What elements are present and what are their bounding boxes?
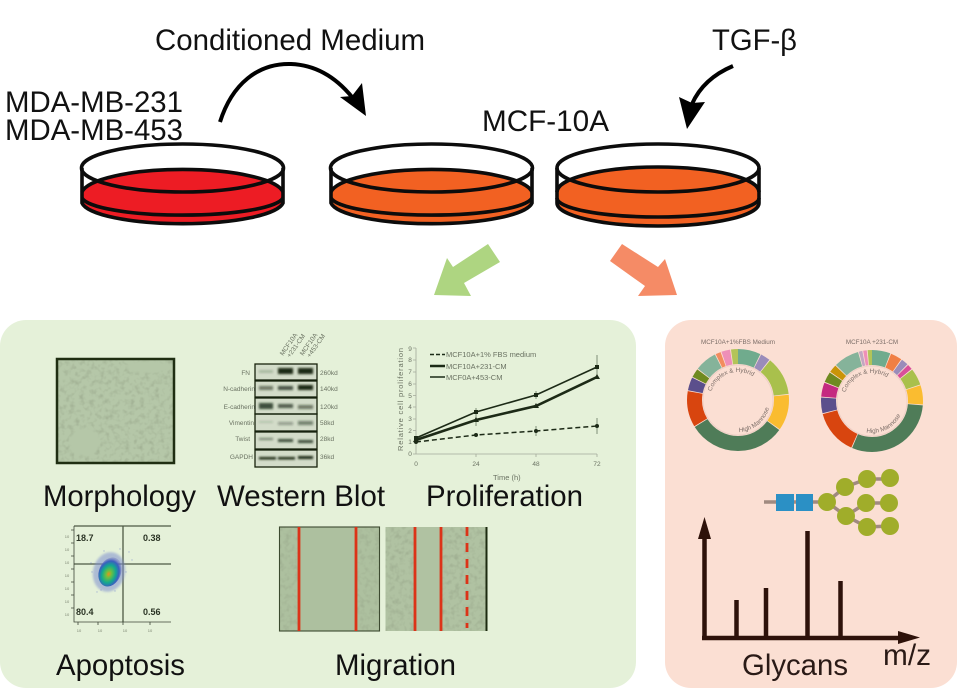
- donut chart: MCF10A +231-CM: High Mannose: [866, 414, 900, 434]
- arrow: to phenotype panel: [434, 244, 500, 296]
- scatter population: [89, 548, 133, 595]
- axis tick labels: [65, 534, 153, 633]
- heading: morphology: Morphology: [43, 480, 196, 513]
- series markers: [413, 365, 600, 444]
- y tick labels: 4: [408, 404, 412, 411]
- y tick labels: 0: [408, 451, 412, 458]
- quadrant values: 80.4: [76, 607, 94, 617]
- blot protein labels: Twist: [235, 436, 250, 443]
- dish: MCF-10A with TGF-beta: [557, 144, 759, 226]
- blot sizes: 28kd: [320, 436, 334, 443]
- blot protein labels: Vimentin: [229, 420, 254, 427]
- heading: migration: Migration: [335, 649, 456, 682]
- blot protein labels: FN: [241, 370, 250, 377]
- heading: western blot: Western Blot: [217, 480, 386, 513]
- label: TGF-beta: TGF-β: [712, 24, 797, 57]
- mass spectrum: [698, 517, 920, 644]
- chart legend: [430, 350, 536, 382]
- series lines: [416, 355, 597, 442]
- heading: glycans: Glycans: [742, 649, 848, 682]
- chart legend: MCF10A+231-CM: [446, 362, 507, 371]
- dish: MCF-10A with conditioned medium: [330, 144, 532, 224]
- blot column headers: [279, 332, 327, 359]
- blot protein labels: GAPDH: [230, 454, 253, 461]
- axis tick labels: 10: [77, 628, 82, 633]
- flow cytometry plot: [65, 526, 171, 633]
- donut chart: MCF10A control: [687, 339, 789, 451]
- donut chart: MCF10A control: MCF10A+1%FBS Medium: [701, 339, 775, 346]
- x tick labels: 24: [472, 461, 480, 468]
- icon: high-mannose glycan structure: [764, 469, 899, 536]
- blot sizes: [320, 370, 338, 461]
- axis tick labels: 10: [65, 534, 70, 539]
- axis tick labels: 10: [65, 612, 70, 617]
- blot sizes: 36kd: [320, 454, 334, 461]
- heading: proliferation: Proliferation: [426, 480, 583, 513]
- donut chart: MCF10A +231-CM: [821, 339, 923, 452]
- y tick labels: 7: [408, 369, 412, 376]
- quadrant values: [76, 533, 161, 617]
- quadrant values: 0.56: [143, 607, 161, 617]
- quadrant values: 0.38: [143, 533, 161, 543]
- donut chart: MCF10A control: High Mannose: [739, 408, 769, 432]
- axis tick labels: 10: [65, 560, 70, 565]
- axis title: relative cell proliferation: Relative cell proliferation: [396, 348, 405, 451]
- y tick labels: 1: [408, 439, 412, 446]
- blot sizes: 260kd: [320, 370, 338, 377]
- axis tick labels: 10: [65, 573, 70, 578]
- axis label: m/z: m/z: [883, 639, 931, 672]
- panel: glycan analysis: [665, 320, 957, 688]
- micrograph: migration later: [386, 527, 486, 631]
- dish: donor cancer cells: [82, 144, 284, 224]
- x tick labels: 48: [532, 461, 540, 468]
- label: MCF-10A: MCF-10A: [482, 105, 609, 138]
- axis tick labels: 10: [65, 586, 70, 591]
- y tick labels: 8: [408, 357, 412, 364]
- plot axes with ticks: [71, 526, 171, 625]
- chart legend: MCF10A+1% FBS medium: [446, 350, 536, 359]
- arrow: TGF-beta treatment: [679, 66, 733, 129]
- blot protein labels: [223, 370, 255, 461]
- blot column headers: MCF10A: [299, 332, 320, 357]
- chart axes: [413, 348, 597, 457]
- heading: apoptosis: Apoptosis: [56, 649, 185, 682]
- quadrant values: 18.7: [76, 533, 94, 543]
- chart legend: MCF0A+453-CM: [446, 373, 502, 382]
- blot column headers: +231-CM: [286, 333, 307, 359]
- donut chart: MCF10A +231-CM: Complex & Hybrid: [842, 368, 889, 392]
- y tick labels: 5: [408, 393, 412, 400]
- y tick labels: 6: [408, 381, 412, 388]
- blot sizes: 140kd: [320, 386, 338, 393]
- arrow: conditioned medium transfer: [220, 64, 366, 122]
- y tick labels: [408, 346, 412, 458]
- blot sizes: 120kd: [320, 404, 338, 411]
- axis tick labels: 10: [98, 628, 103, 633]
- x tick labels: [414, 461, 601, 468]
- donut chart: MCF10A +231-CM: MCF10A +231-CM: [846, 339, 898, 346]
- x tick labels: 72: [593, 461, 601, 468]
- x tick labels: 0: [414, 461, 418, 468]
- label: donor cell lines: MDA-MB-453: [5, 114, 183, 147]
- western blot: [223, 332, 338, 467]
- axis title: time: Time (h): [493, 473, 521, 482]
- axis tick labels: 10: [65, 547, 70, 552]
- blot protein labels: N-cadherin: [223, 386, 255, 393]
- donut chart: MCF10A control: Complex & Hybrid: [708, 368, 755, 391]
- axis tick labels: 10: [123, 628, 128, 633]
- label: donor cell lines: MDA-MB-231: [5, 86, 183, 119]
- blot rows: [255, 364, 317, 467]
- y tick labels: 3: [408, 416, 412, 423]
- blot sizes: 58kd: [320, 420, 334, 427]
- axis tick labels: 10: [148, 628, 153, 633]
- blot protein labels: E-cadherin: [224, 404, 255, 411]
- y tick labels: 9: [408, 346, 412, 353]
- blot column headers: +453-CM: [306, 333, 327, 359]
- panel: phenotype assays: [0, 320, 636, 688]
- label: donor cell lines: [5, 86, 183, 147]
- micrograph: morphology: [57, 359, 174, 463]
- arrow: to glycan panel: [610, 244, 677, 296]
- label: conditioned medium: Conditioned Medium: [155, 24, 425, 57]
- micrograph: migration day 0: [280, 527, 380, 631]
- blot column headers: MCF10A: [279, 332, 300, 357]
- line chart: proliferation: [396, 346, 601, 482]
- y tick labels: 2: [408, 428, 412, 435]
- axis tick labels: 10: [65, 599, 70, 604]
